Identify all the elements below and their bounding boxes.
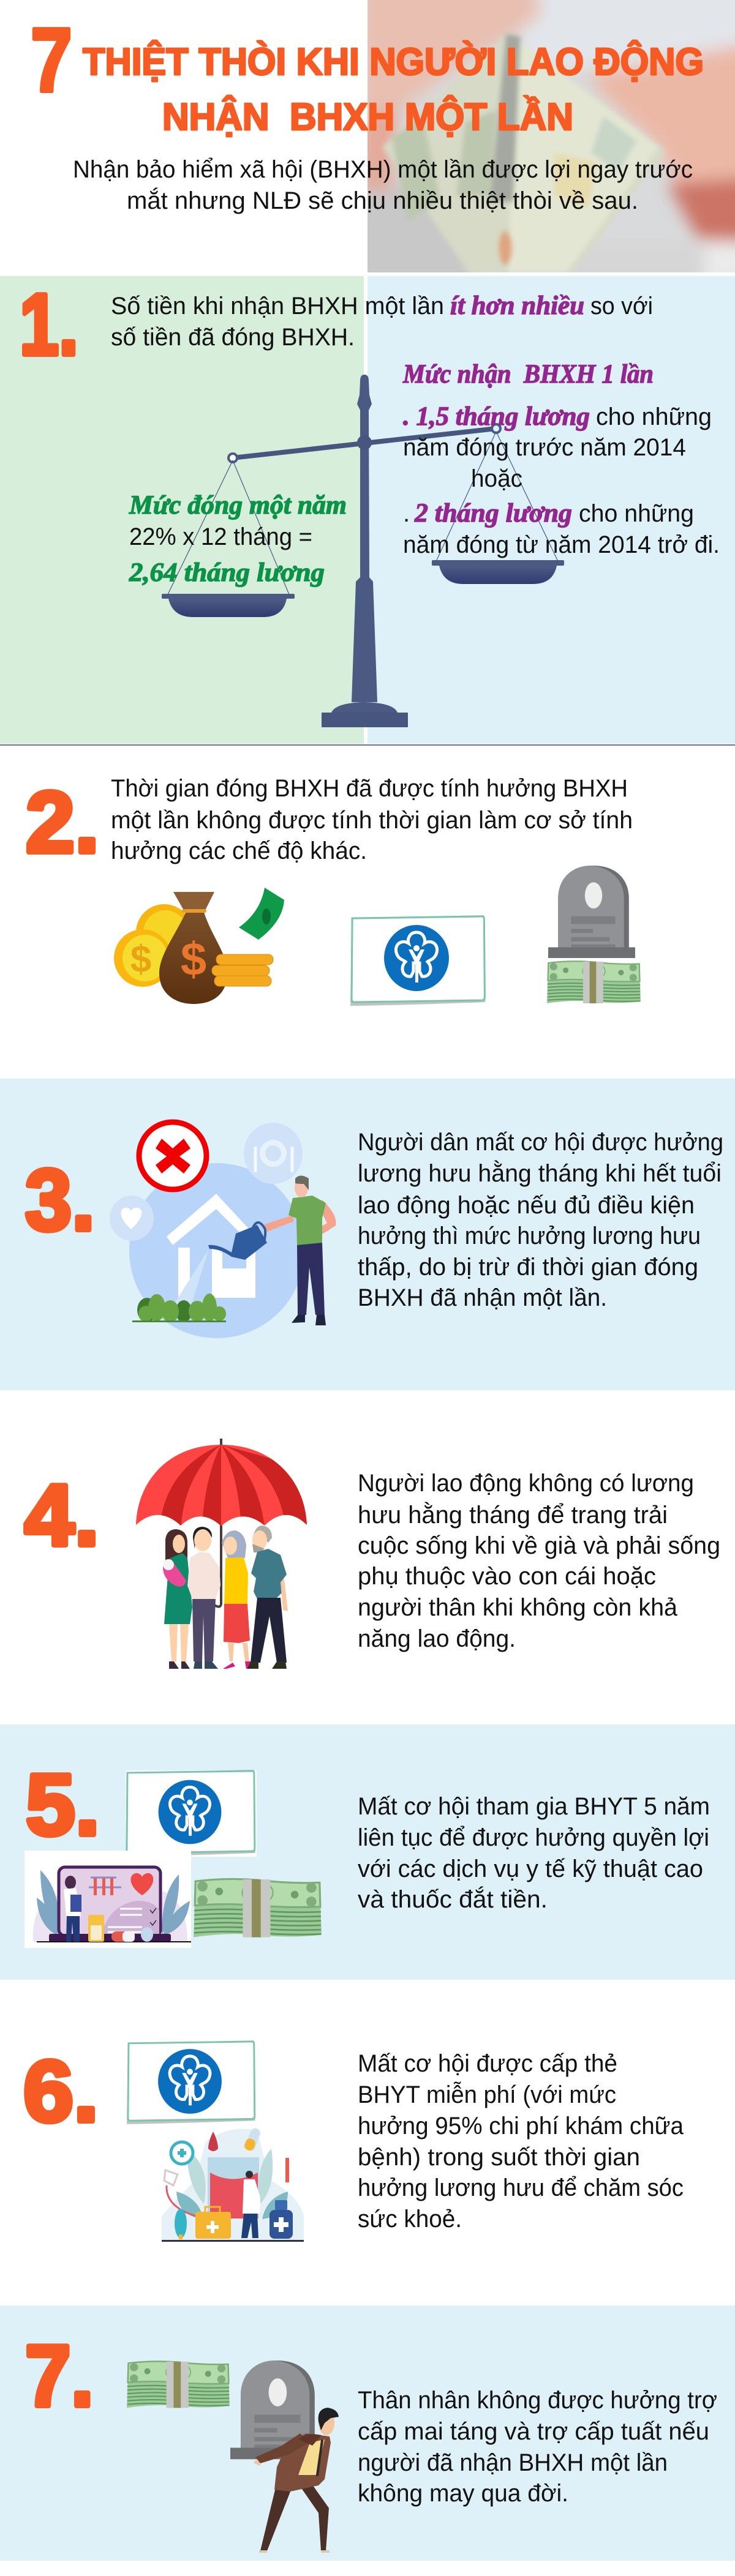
section 1 text: so với xyxy=(590,293,653,320)
section 2 text: một lần không được tính thời gian làm cơ sở tính xyxy=(111,807,633,834)
icon: money bag with coins xyxy=(114,888,284,1004)
section 3 text: thấp, do bị trừ đi thời gian đóng xyxy=(358,1254,698,1281)
section 7 text: Thân nhân không được hưởng trợ xyxy=(358,2387,717,2414)
number 6: 6. xyxy=(23,2043,99,2140)
section 4 text: năng lao động. xyxy=(358,1625,516,1652)
number 7: 7. xyxy=(25,2327,94,2425)
text: payment per year: Mức đóng một năm xyxy=(129,491,347,520)
text: one-time benefit: hoặc xyxy=(471,465,522,492)
text: one-time benefit: cho những xyxy=(579,500,694,527)
title xyxy=(31,10,704,138)
text: payment per year: 2,64 tháng lương xyxy=(129,558,325,587)
section 3 text xyxy=(358,1129,723,1311)
intro text: Nhận bảo hiểm xã hội (BHXH) một lần được lợi ngay trước xyxy=(73,156,693,183)
section 5 text: Mất cơ hội tham gia BHYT 5 năm xyxy=(358,1793,710,1820)
icon: man carrying tombstone xyxy=(230,2361,339,2553)
section 2 text: Thời gian đóng BHXH đã được tính hưởng BHXH xyxy=(111,775,628,802)
number 5: 5. xyxy=(26,1756,100,1854)
section 3 text: Người dân mất cơ hội được hưởng xyxy=(358,1129,723,1156)
section 6 text: hưởng 95% chi phí khám chữa xyxy=(358,2113,684,2140)
icon: banknote stack xyxy=(127,2361,230,2408)
section 6 text xyxy=(358,2050,684,2233)
section 3 text: lao động hoặc nếu đủ điều kiện xyxy=(358,1192,695,1219)
section 6 text: bệnh) trong suốt thời gian xyxy=(358,2144,640,2171)
section 6 text: BHYT miễn phí (với mức xyxy=(358,2081,616,2108)
intro text: mắt nhưng NLĐ sẽ chịu nhiều thiệt thòi về sau. xyxy=(127,187,638,214)
illustration: medical laptop xyxy=(24,1851,191,1948)
section 3 text: BHXH đã nhận một lần. xyxy=(358,1284,607,1311)
panel: section 4 xyxy=(24,1439,720,1669)
section 3 text: lương hưu hằng tháng khi hết tuổi xyxy=(358,1159,722,1187)
panel: section 7 xyxy=(0,2305,735,2561)
icon: social insurance card xyxy=(350,915,485,1006)
title number 7: 7 xyxy=(31,10,72,111)
section 1 text xyxy=(111,291,653,351)
section 5 text: liên tục để được hưởng quyền lợi xyxy=(358,1824,709,1851)
text: one-time benefit: . xyxy=(403,500,410,527)
number 1: 1. xyxy=(20,276,78,373)
section 5 text: và thuốc đắt tiền. xyxy=(358,1885,548,1913)
elderly man xyxy=(247,1526,288,1669)
intro text xyxy=(73,156,693,214)
section 4 text: phụ thuộc vào con cái hoặc xyxy=(358,1563,656,1590)
section 6 text: hưởng lương hưu để chăm sóc xyxy=(358,2174,684,2201)
young man xyxy=(187,1527,221,1669)
section 7 text: cấp mai táng và trợ cấp tuất nếu xyxy=(358,2418,709,2445)
title line one: THIỆT THÒI KHI NGƯỜI LAO ĐỘNG xyxy=(83,41,704,83)
icon: social insurance card xyxy=(126,1770,257,1857)
illustration: man watering house xyxy=(110,1122,336,1338)
panel: section 2 xyxy=(26,774,641,1006)
section 4 text: Người lao động không có lương xyxy=(358,1470,694,1497)
number 3: 3. xyxy=(25,1151,95,1249)
icon: banknote stack xyxy=(194,1879,322,1938)
section 5 text: với các dịch vụ y tế kỹ thuật cao xyxy=(358,1855,703,1882)
section 3 text: hưởng thì mức hưởng lương hưu xyxy=(358,1222,701,1249)
number 2: 2. xyxy=(26,774,99,871)
icon: social insurance card xyxy=(127,2040,255,2124)
section 7 text xyxy=(358,2387,717,2507)
text: one-time benefit: năm đóng từ năm 2014 trở đi. xyxy=(403,531,720,558)
text: one-time benefit: 2 tháng lương xyxy=(414,499,572,528)
section 6 text: Mất cơ hội được cấp thẻ xyxy=(358,2050,617,2077)
panel: section 5 xyxy=(0,1724,735,1980)
woman with baby xyxy=(163,1529,192,1669)
text: payment per year: 22% x 12 tháng = xyxy=(129,523,312,550)
text: one-time benefit: Mức nhận BHXH 1 lần xyxy=(402,360,654,389)
icon: money bag with coins: $ xyxy=(181,934,206,986)
section 2 text: hưởng các chế độ khác. xyxy=(111,837,367,864)
elderly woman xyxy=(222,1530,251,1669)
panel: section 3 xyxy=(0,1079,735,1390)
panel: section 1 xyxy=(0,276,735,746)
text: one-time benefit: cho những xyxy=(596,403,712,430)
section 5 text xyxy=(358,1793,710,1913)
illustration: family under umbrella xyxy=(135,1439,309,1669)
text: one-time benefit: năm đóng trước năm 2014 xyxy=(403,434,686,461)
icon: banknote stack xyxy=(547,961,641,1003)
number 4: 4. xyxy=(24,1467,99,1564)
header photo: hands holding banknotes xyxy=(355,0,735,288)
section 4 text: người thân khi không còn khả xyxy=(358,1594,678,1621)
text: one-time benefit xyxy=(402,360,720,558)
panel: section 6 xyxy=(23,2040,684,2242)
section 1 text: ít hơn nhiều xyxy=(450,291,584,320)
section 2 text xyxy=(111,775,633,864)
icon: tombstone xyxy=(548,866,635,958)
section 6 text: sức khoẻ. xyxy=(358,2206,462,2233)
title line two: NHẬN BHXH MỘT LẦN xyxy=(162,96,573,138)
text: payment per year xyxy=(129,491,347,587)
icon: money bag with coins: $ xyxy=(130,938,151,981)
text: one-time benefit: . 1,5 tháng lương xyxy=(403,402,590,431)
section 4 text: cuộc sống khi về già và phải sống xyxy=(358,1532,720,1559)
section 4 text: hưu hằng tháng để trang trải xyxy=(358,1501,668,1529)
balance scale xyxy=(162,375,564,727)
section 7 text: không may qua đời. xyxy=(358,2480,568,2507)
section 7 text: người đã nhận BHXH một lần xyxy=(358,2449,668,2476)
section 1 text: Số tiền khi nhận BHXH một lần xyxy=(111,293,444,320)
section 4 text xyxy=(358,1470,720,1652)
icon: red cross mark xyxy=(139,1122,206,1189)
section 1 text: số tiền đã đóng BHXH. xyxy=(111,324,355,351)
illustration: medical care xyxy=(162,2127,304,2242)
